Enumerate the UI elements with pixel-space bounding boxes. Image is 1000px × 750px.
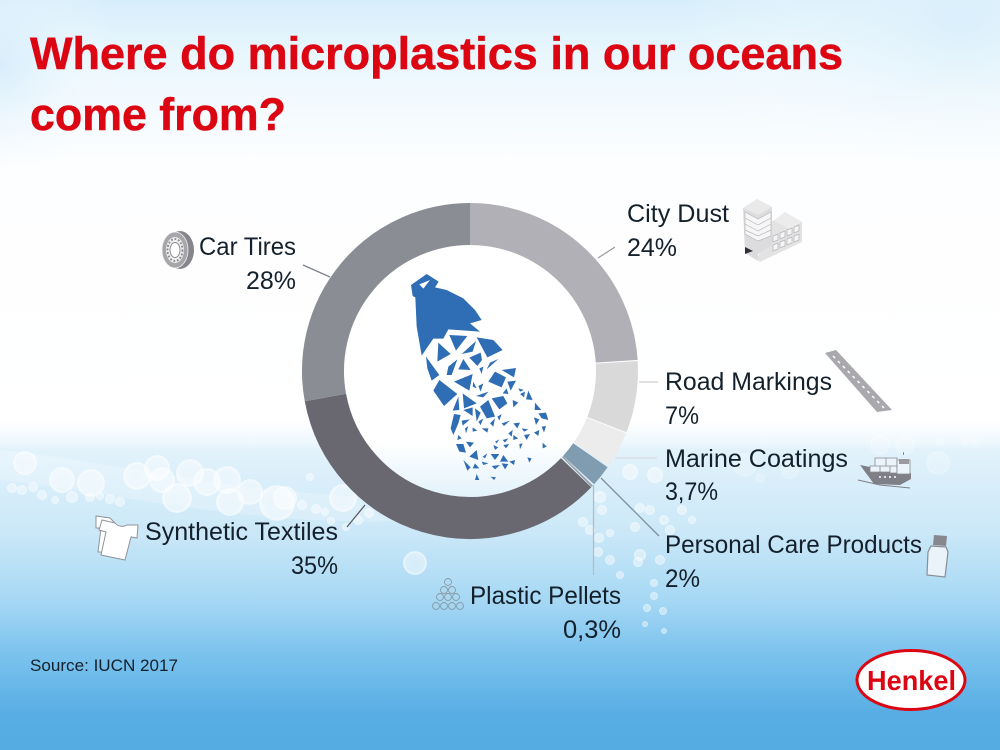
label: Personal Care Products 2%: 2%: [665, 565, 700, 593]
icon: t-shirts: [96, 516, 138, 560]
donut chart: [323, 224, 617, 518]
label: Plastic Pellets 0,3%: 0,3%: [563, 616, 621, 644]
label: Road Markings 7%: Road Markings: [665, 368, 832, 396]
icon: shattering plastic bottle: [411, 274, 548, 480]
Henkel logo: [857, 650, 965, 710]
title: [30, 28, 843, 140]
donut centre: [343, 244, 597, 498]
label: Synthetic Textiles 35%: Synthetic Textiles: [145, 518, 338, 546]
label: Car Tires 28%: [199, 233, 296, 295]
Henkel logo: Henkel: [867, 665, 956, 696]
segment: Car Tires 28%: [323, 224, 470, 398]
segment: Plastic Pellets 0.3%: [577, 471, 578, 472]
label: Synthetic Textiles 35%: 35%: [291, 552, 338, 580]
label: Marine Coatings 3,7%: 3,7%: [665, 478, 718, 506]
bubbles: [7, 435, 979, 634]
label: Plastic Pellets 0,3%: Plastic Pellets: [470, 582, 621, 610]
label: Car Tires 28%: Car Tires: [199, 233, 296, 261]
label: Personal Care Products 2%: Personal Care Products: [665, 531, 922, 559]
label: Plastic Pellets 0,3%: [470, 582, 621, 644]
icon: cargo ship: [858, 452, 911, 488]
icon: city buildings: [743, 199, 802, 262]
label: Road Markings 7%: [665, 368, 832, 430]
segment: Road Markings 7%: [607, 362, 617, 425]
segment: Personal Care Products 2%: [579, 455, 590, 470]
icon: car tire: [162, 231, 194, 269]
label: Road Markings 7%: 7%: [665, 402, 699, 430]
label: Marine Coatings 3,7%: Marine Coatings: [665, 445, 848, 473]
segment: Synthetic Textiles 35%: [325, 398, 576, 518]
label: City Dust 24%: [627, 200, 729, 262]
label: Personal Care Products 2%: [665, 531, 922, 593]
label: City Dust 24%: City Dust: [627, 200, 729, 228]
label: Synthetic Textiles 35%: [145, 518, 338, 580]
label: City Dust 24%: 24%: [627, 234, 677, 262]
label: Marine Coatings 3,7%: [665, 445, 848, 506]
source note: Source: IUCN 2017: [30, 656, 178, 675]
title: Where do microplastics in our oceans: [30, 28, 843, 79]
segment: City Dust 24%: [470, 224, 617, 361]
icon: cosmetic bottle: [927, 535, 948, 577]
label: Car Tires 28%: 28%: [246, 267, 296, 295]
segment: Marine Coatings 3.7%: [591, 426, 606, 454]
icon: road: [825, 350, 892, 412]
title: come from?: [30, 89, 286, 140]
icon: plastic pellets: [432, 578, 464, 610]
leader lines: [303, 247, 659, 575]
